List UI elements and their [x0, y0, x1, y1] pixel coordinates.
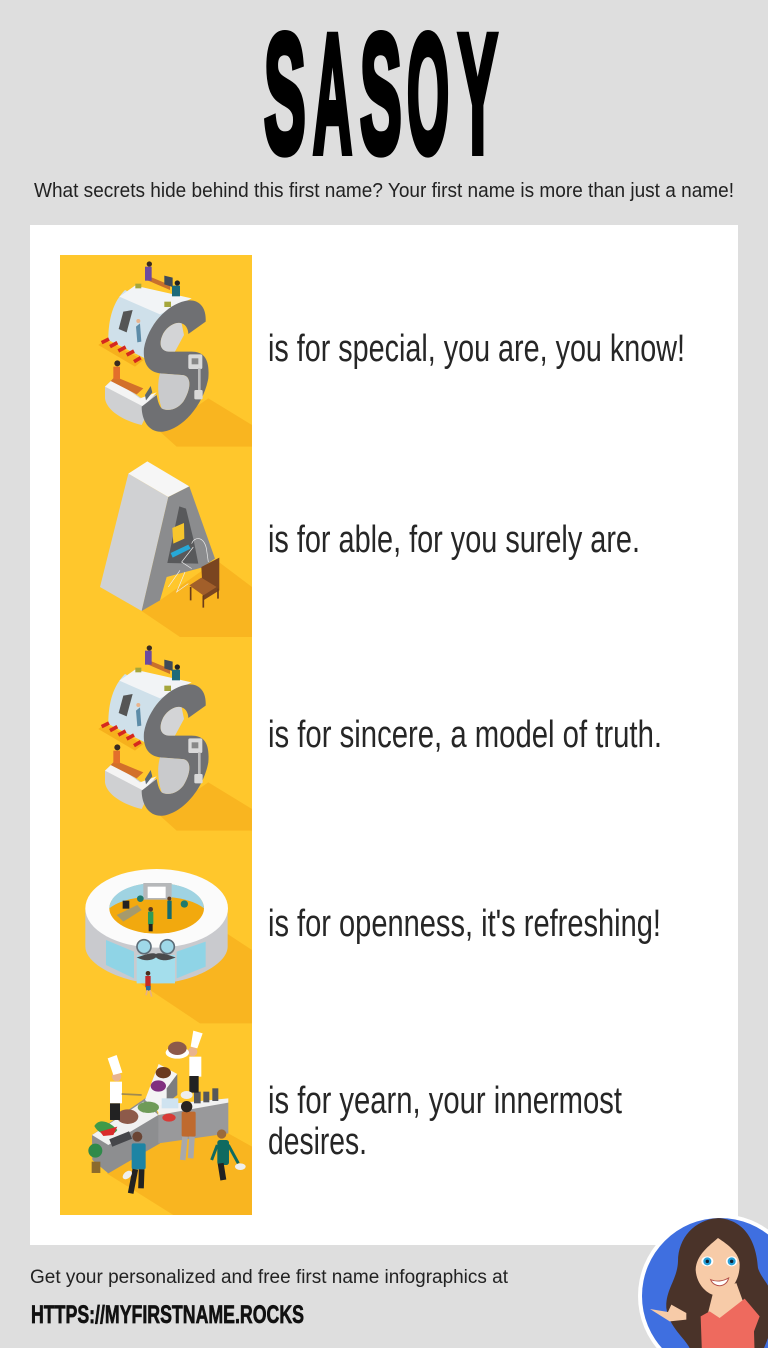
- footer url: HTTPS://MYFIRSTNAME.ROCKS: [31, 1301, 304, 1329]
- icon: letter A: [100, 461, 252, 637]
- title: S: [264, 0, 306, 188]
- icon: letter Y: [88, 1031, 252, 1215]
- title: O: [407, 0, 449, 188]
- subtitle: What secrets hide behind this first name? Your first name is more than just a name!: [34, 180, 734, 202]
- title: Y: [458, 0, 497, 188]
- title: [264, 0, 497, 188]
- text: S line two: is for sincere, a model of truth.: [268, 714, 662, 756]
- title: A: [313, 0, 352, 188]
- title: S: [360, 0, 402, 188]
- footer prompt: Get your personalized and free first name infographics at: [30, 1267, 509, 1288]
- icon: letter O: [85, 869, 252, 1023]
- text: Y line: [268, 1080, 622, 1163]
- text: Y line: desires.: [268, 1121, 367, 1163]
- icon: letter S: [98, 261, 252, 447]
- text: A line: is for able, for you surely are.: [268, 519, 640, 561]
- icon: letter S repeated: [98, 645, 252, 831]
- text: O line: is for openness, it's refreshing!: [268, 903, 661, 945]
- text: Y line: is for yearn, your innermost: [268, 1080, 622, 1122]
- illustration strip: [60, 255, 252, 1215]
- avatar: [638, 1214, 768, 1348]
- panel: white card: [30, 225, 738, 1245]
